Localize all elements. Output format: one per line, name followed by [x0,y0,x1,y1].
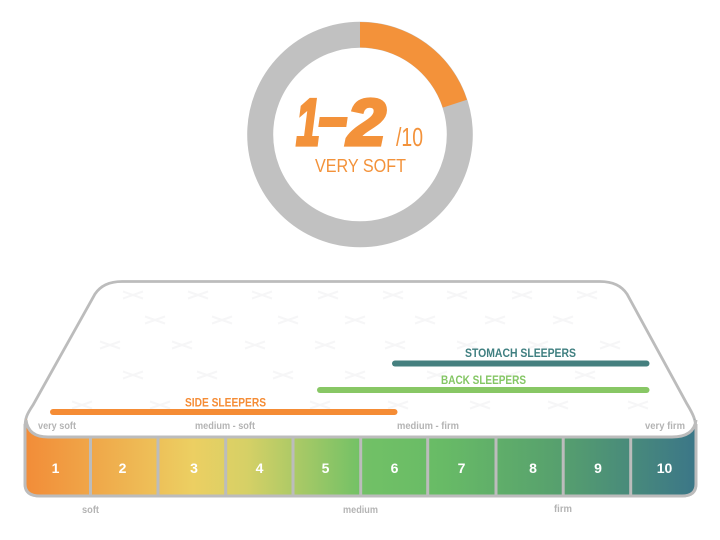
label: very soft: VERY SOFT [315,155,406,176]
top firmness labels: medium - firm [397,421,459,432]
scale numbers: 8 [529,460,537,476]
scale numbers: 1 [52,460,60,476]
top firmness labels: very soft [38,421,77,432]
bottom firmness labels: firm [554,504,572,515]
stomach sleepers range: STOMACH SLEEPERS [465,346,576,360]
scale numbers: 2 [119,460,127,476]
scale numbers: 7 [458,460,466,476]
scale numbers: 4 [256,460,264,476]
mattress top surface [25,282,696,496]
back sleepers range [317,373,650,393]
score: 1-2 out of 10: 2 [345,85,386,159]
scale numbers [52,460,672,476]
score: 1-2 out of 10 [296,85,423,159]
top firmness labels [38,421,685,432]
bottom firmness labels [82,504,572,516]
back sleepers range: BACK SLEEPERS [441,373,526,387]
score: 1-2 out of 10: /10 [396,122,423,152]
top firmness labels: very firm [645,421,685,432]
scale numbers: 6 [391,460,399,476]
bottom firmness labels: medium [343,505,378,516]
bottom firmness labels: soft [82,505,100,516]
donut chart [260,22,467,234]
firmness scale band [25,418,696,496]
quilting pattern [72,292,648,408]
mattress [25,282,696,496]
score: 1-2 out of 10: 1 [296,85,320,159]
scale numbers: 10 [657,460,672,476]
side sleepers range [50,396,398,415]
scale numbers: 9 [594,460,602,476]
top firmness labels: medium - soft [195,421,256,432]
side sleepers range: SIDE SLEEPERS [185,396,266,410]
scale numbers: 3 [190,460,198,476]
stomach sleepers range [392,346,650,366]
scale numbers: 5 [322,460,330,476]
